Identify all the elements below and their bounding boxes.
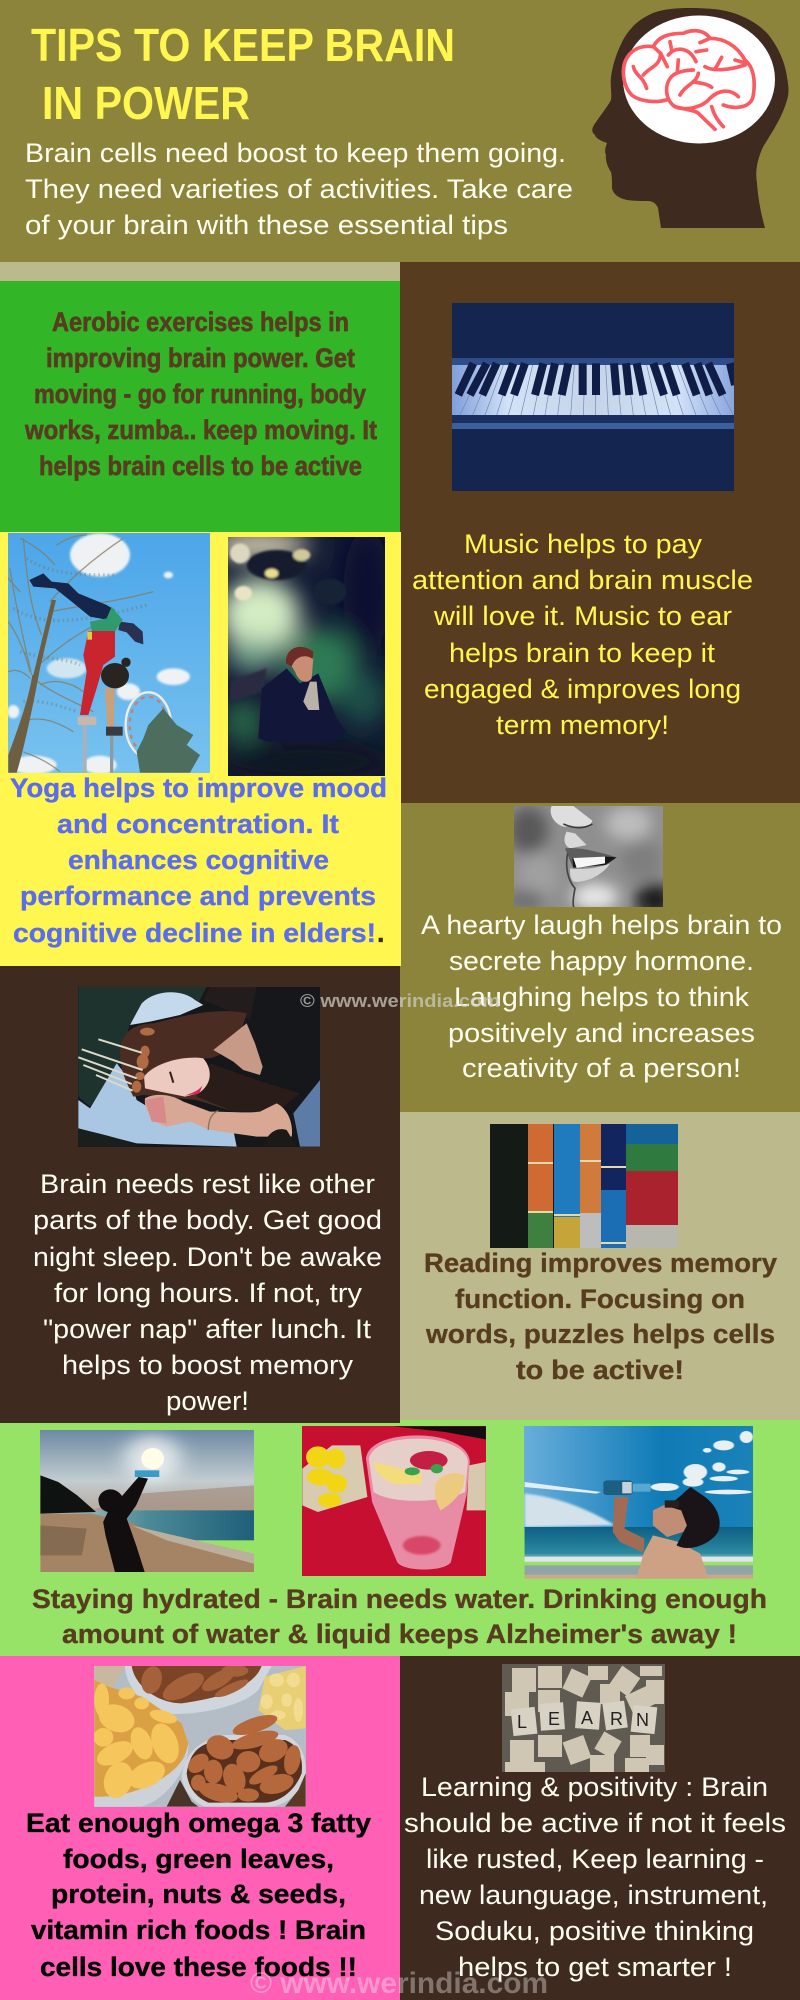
photo: smiling mouth xyxy=(514,806,663,907)
music text: helps brain to keep it xyxy=(449,638,716,668)
reading text: words, puzzles helps cells xyxy=(425,1319,775,1349)
aerobic text: works, zumba.. keep moving. It xyxy=(24,415,377,445)
panel: laughter xyxy=(402,803,800,1112)
tile letters: R xyxy=(610,1709,623,1729)
learning text: helps to get smarter ! xyxy=(458,1952,732,1982)
nutrition text: vitamin rich foods ! Brain xyxy=(31,1915,366,1945)
learning text: Learning & positivity : Brain xyxy=(421,1772,768,1802)
title xyxy=(31,19,455,129)
photo: piano keys xyxy=(452,303,735,491)
hydration text: amount of water & liquid keeps Alzheimer's away ! xyxy=(62,1619,737,1649)
yoga text xyxy=(10,773,387,948)
tile letters xyxy=(518,1711,648,1728)
sleep text: for long hours. If not, try xyxy=(54,1278,363,1308)
photo: fruit water glass xyxy=(302,1426,486,1576)
yoga text: enhances cognitive xyxy=(68,845,329,875)
nutrition text: foods, green leaves, xyxy=(63,1844,334,1874)
photo: sleeping woman xyxy=(78,987,320,1147)
aerobic text xyxy=(24,307,377,481)
beach silhouette figure xyxy=(98,1477,148,1572)
tile letters: L xyxy=(517,1712,527,1732)
tile letters: N xyxy=(636,1710,649,1730)
intro text xyxy=(25,138,573,240)
panel: reading xyxy=(400,1112,800,1420)
learning text: new launguage, instrument, xyxy=(419,1880,768,1910)
aerobic text: Aerobic exercises helps in xyxy=(52,307,349,337)
laughter text: positively and increases xyxy=(448,1018,755,1048)
intro text: of your brain with these essential tips xyxy=(25,210,508,240)
laughter text: A hearty laugh helps brain to xyxy=(421,910,782,940)
watermark: bottom: © www.werindia.com xyxy=(250,1967,548,2000)
photo: praying man in forest xyxy=(228,537,385,776)
laughter text: secrete happy hormone. xyxy=(449,946,754,976)
photo: scrabble tiles LEARN xyxy=(502,1664,665,1772)
panel: header xyxy=(0,0,800,262)
photo: beach silhouette drinking xyxy=(40,1430,254,1572)
nutrition text: protein, nuts & seeds, xyxy=(51,1879,346,1909)
photo: bowls of nuts xyxy=(93,1664,306,1807)
laughter text: creativity of a person! xyxy=(462,1053,741,1083)
sleep text: night sleep. Don't be awake xyxy=(33,1242,382,1272)
panel: sleep xyxy=(0,966,400,1423)
praying man xyxy=(258,647,347,742)
music text: attention and brain muscle xyxy=(412,565,753,595)
learning text: Soduku, positive thinking xyxy=(435,1916,754,1946)
panel: music xyxy=(400,262,800,803)
nutrition text xyxy=(26,1808,371,1982)
music text: engaged & improves long xyxy=(424,674,741,704)
sleep text xyxy=(33,1169,382,1416)
nutrition text: cells love these foods !! xyxy=(40,1952,357,1982)
music text: Music helps to pay xyxy=(464,529,703,559)
reading text xyxy=(424,1248,777,1385)
photo: handstand yoga xyxy=(7,533,210,774)
music text: term memory! xyxy=(496,710,669,740)
hydration text: Staying hydrated - Brain needs water. Drinking enough xyxy=(32,1584,767,1614)
sleep text: power! xyxy=(166,1386,249,1416)
yoga text: and concentration. It xyxy=(57,809,339,839)
yoga text: performance and prevents xyxy=(20,881,376,911)
yoga figure xyxy=(29,573,143,773)
photo: man drinking at sea xyxy=(524,1426,753,1579)
panel: aerobic exercise xyxy=(0,281,400,532)
panel: learning xyxy=(400,1656,800,2000)
tile letters: E xyxy=(548,1709,560,1729)
sleep text: helps to boost memory xyxy=(62,1350,354,1380)
panel: nutrition xyxy=(0,1656,400,2000)
music text xyxy=(412,529,753,740)
watermark: top: © www.werindia.com xyxy=(300,991,500,1011)
icon: head with brain xyxy=(592,8,788,228)
sleep text: "power nap" after lunch. It xyxy=(43,1314,372,1344)
laughter text: Laughing helps to think xyxy=(454,982,750,1012)
sleep text: parts of the body. Get good xyxy=(33,1205,382,1235)
sleep text: Brain needs rest like other xyxy=(40,1169,375,1199)
reading text: function. Focusing on xyxy=(455,1284,745,1314)
ferris wheel xyxy=(126,692,171,758)
reading text: to be active! xyxy=(516,1355,684,1385)
music text: will love it. Music to ear xyxy=(433,601,732,631)
tile letters: A xyxy=(581,1708,593,1728)
photo: books xyxy=(490,1124,678,1248)
panel: hydration xyxy=(0,1420,800,1656)
nutrition text: Eat enough omega 3 fatty xyxy=(26,1808,371,1838)
aerobic text: improving brain power. Get xyxy=(46,343,355,373)
yoga text: . xyxy=(377,918,385,948)
man figure xyxy=(603,1480,720,1579)
title: IN POWER xyxy=(42,77,250,129)
aerobic text: helps brain cells to be active xyxy=(39,451,362,481)
learning text: should be active if not it feels xyxy=(404,1808,786,1838)
reading text: Reading improves memory xyxy=(424,1248,777,1278)
learning text xyxy=(404,1772,786,1982)
laughter text xyxy=(421,910,782,1083)
aerobic text: moving - go for running, body xyxy=(34,379,366,409)
learning text: like rusted, Keep learning - xyxy=(426,1844,764,1874)
title: TIPS TO KEEP BRAIN xyxy=(31,19,455,71)
panel: yoga xyxy=(0,528,401,966)
hydration text xyxy=(32,1584,767,1649)
icon: brain xyxy=(623,31,754,129)
panel: beige strip xyxy=(0,262,400,281)
yoga text: Yoga helps to improve mood xyxy=(10,773,387,803)
intro text: Brain cells need boost to keep them going. xyxy=(25,138,566,168)
yoga text: cognitive decline in elders! xyxy=(13,918,376,948)
intro text: They need varieties of activities. Take care xyxy=(25,174,573,204)
